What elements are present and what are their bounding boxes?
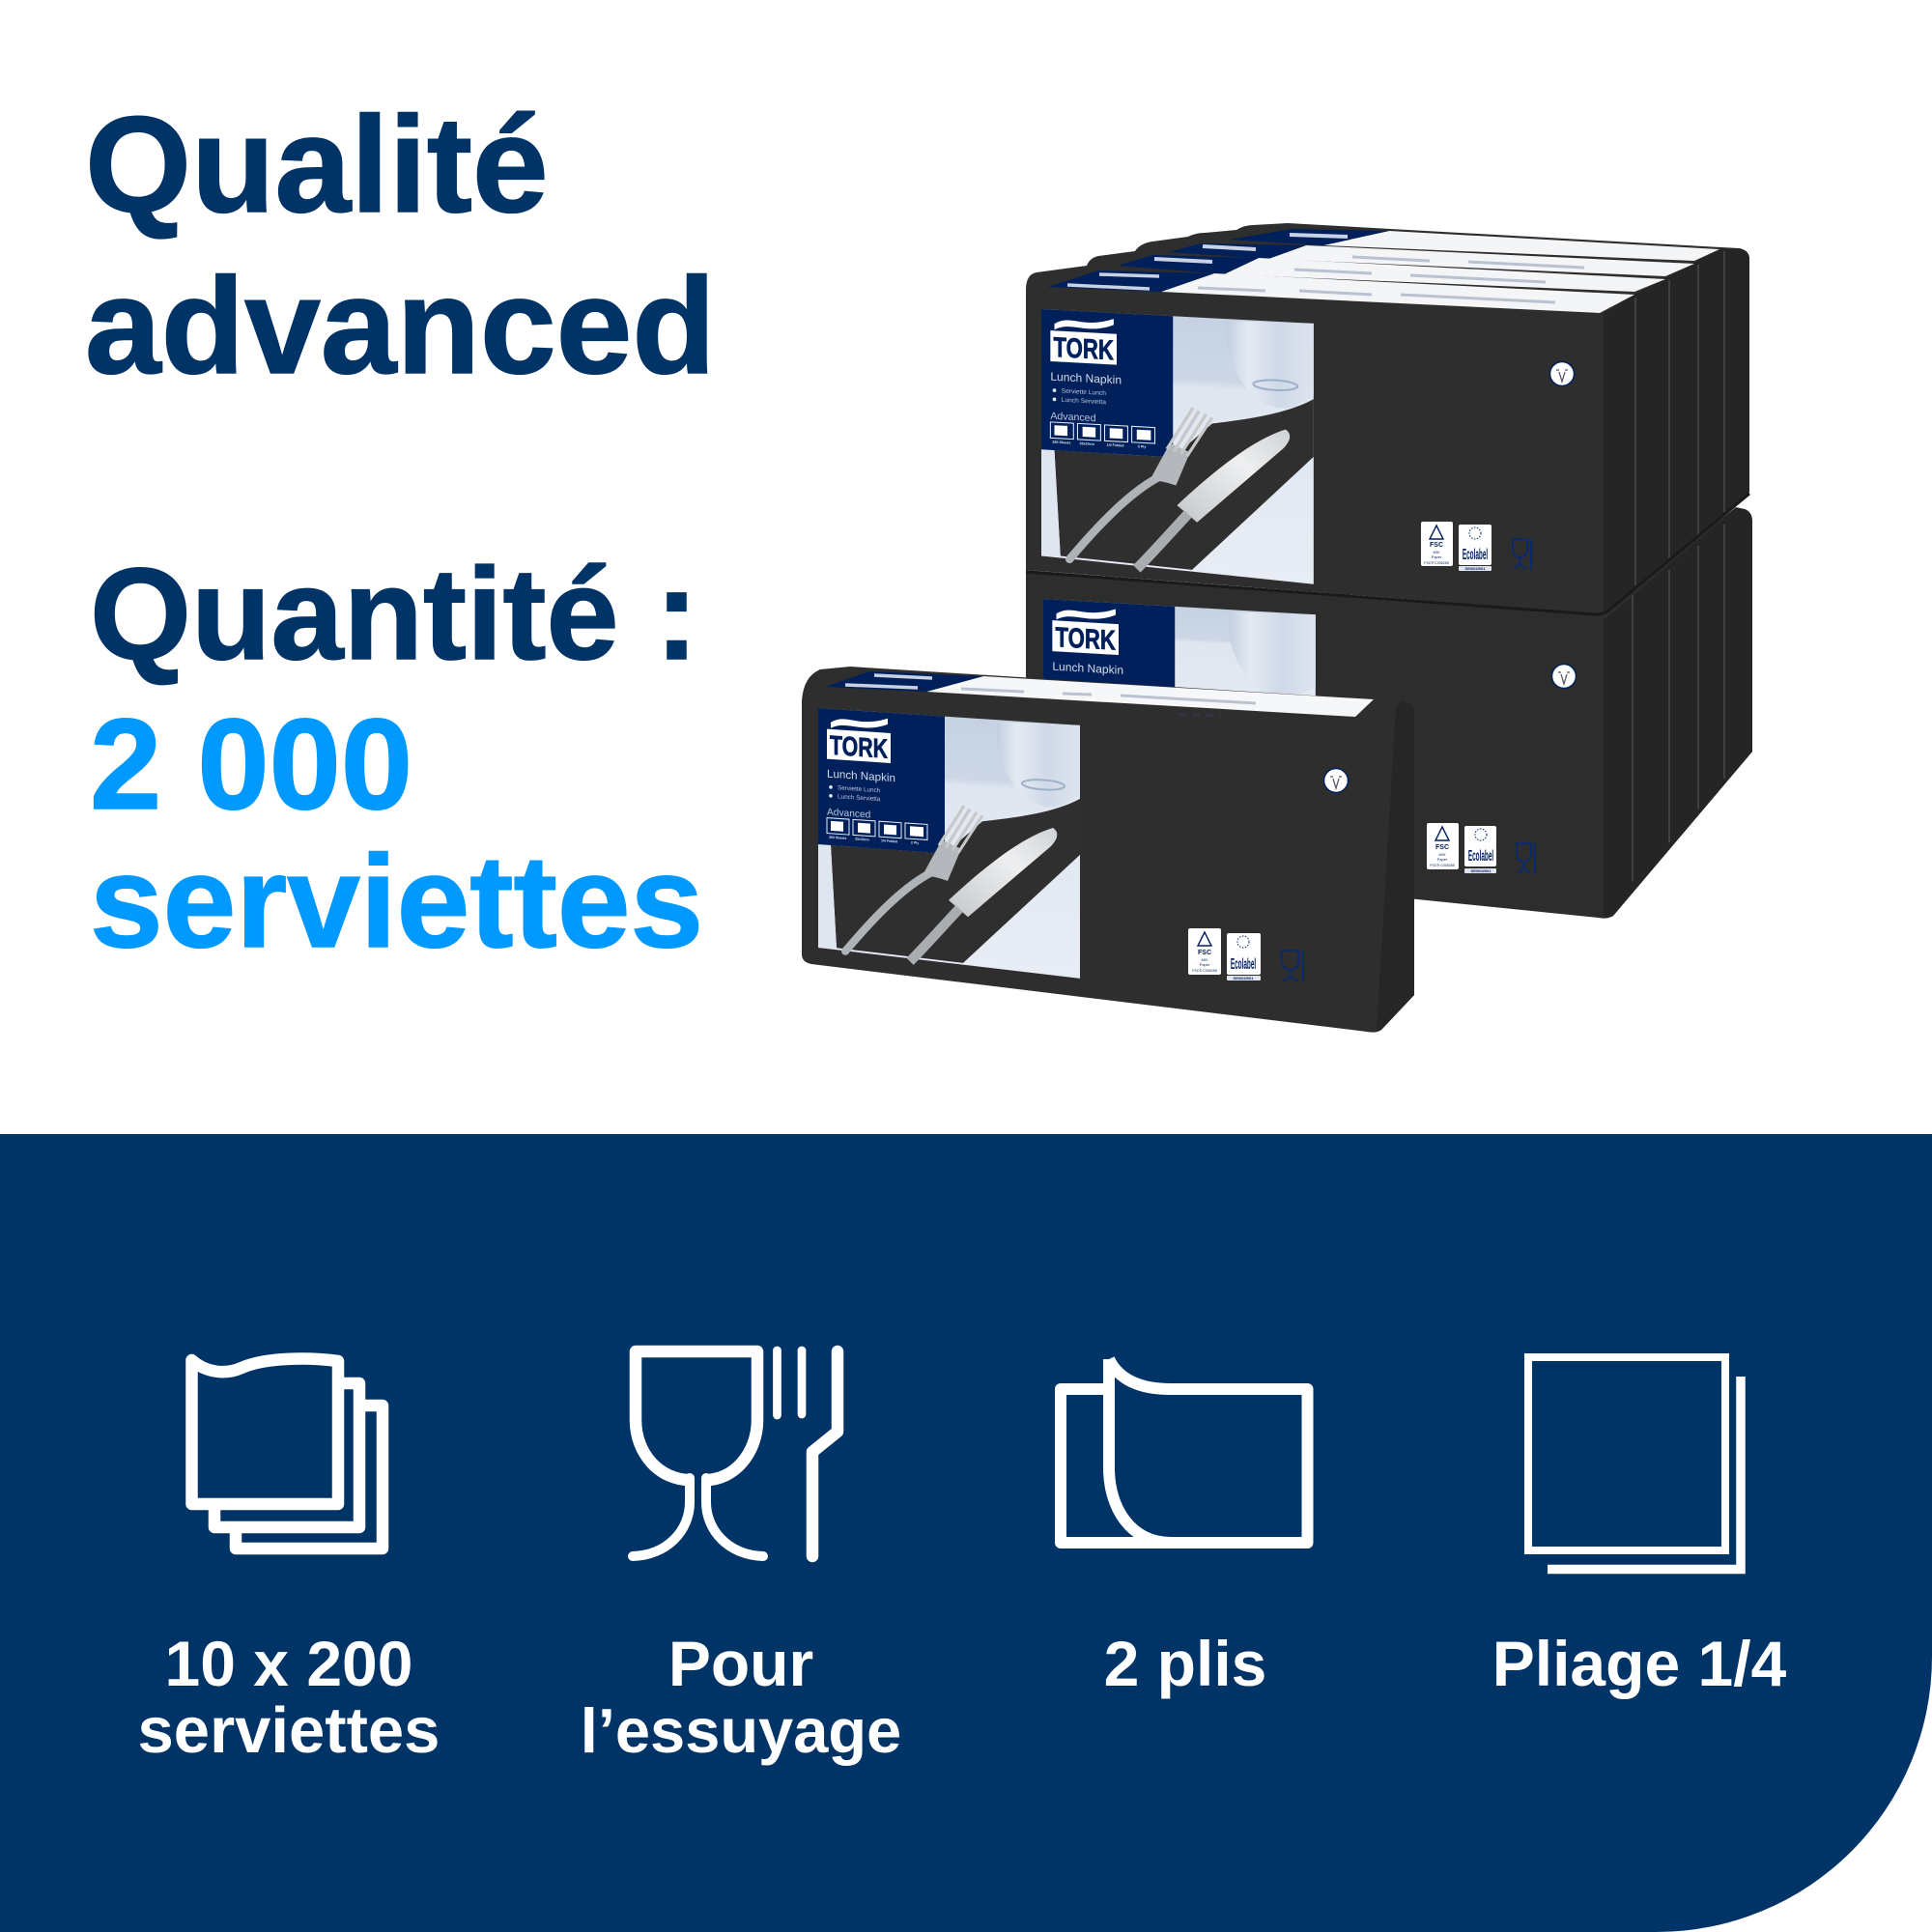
front pack certifications — [1188, 928, 1303, 981]
pack top band 2 — [1118, 255, 1665, 292]
front pack label: 33x33cm — [855, 838, 869, 841]
lower stack sticker — [1551, 665, 1577, 688]
lower stack certifications: MIX — [1438, 852, 1446, 857]
front pack sticker — [1323, 769, 1349, 792]
front pack certifications: FSC — [1198, 950, 1211, 956]
upper pack label: 33x33cm — [1080, 441, 1094, 446]
label: for wiping: l’essuyage — [581, 1695, 901, 1766]
upper pack certifications: SE/004/001 — [1465, 566, 1486, 571]
label: 10 x 200 napkins: 10 x 200 — [165, 1628, 412, 1699]
heading: quantity: serviettes — [90, 828, 703, 975]
upper pack sticker — [1549, 361, 1575, 386]
front pack — [802, 667, 1414, 1033]
upper pack certifications: FSC® C005255 — [1424, 561, 1449, 565]
lower stack certifications: FSC® C005255 — [1430, 864, 1455, 867]
front pack label: 360 Sheets — [829, 836, 846, 840]
lower stack label — [1043, 599, 1316, 744]
front pack certifications: MIX — [1201, 957, 1208, 962]
front pack label: Lunch Servietta — [838, 793, 881, 803]
front pack label: 2 Ply — [911, 840, 919, 845]
label: 10 x 200 napkins — [138, 1628, 440, 1767]
front pack certifications: Ecolabel — [1231, 955, 1256, 973]
front pack label: Advanced — [827, 808, 871, 821]
heading: quantity: Quantité : — [90, 541, 698, 687]
front pack certifications: SE/004/001 — [1234, 976, 1254, 980]
upper pack certifications: Paper — [1432, 554, 1442, 559]
label: quarter fold: Pliage 1/4 — [1492, 1628, 1787, 1699]
front pack certifications: Paper — [1200, 962, 1210, 967]
upper stack of packs — [1026, 223, 1749, 614]
upper pack label: 360 Sheets — [1052, 440, 1070, 445]
upper pack certifications: FSC — [1430, 542, 1443, 549]
heading: quality: Qualité — [85, 88, 549, 241]
heading: quantity — [90, 541, 703, 975]
product image: stacked napkin packs — [802, 223, 1752, 1033]
upper pack label: TORK — [1053, 332, 1114, 366]
label: 10 x 200 napkins: serviettes — [138, 1694, 440, 1767]
upper pack label: Lunch Servietta — [1062, 397, 1106, 406]
upper pack certifications: Ecolabel — [1463, 546, 1488, 563]
lower stack label: Lunch Napkin — [1052, 660, 1123, 677]
front pack label — [818, 708, 1080, 979]
upper pack label — [1041, 309, 1314, 584]
pack top band 3 — [1169, 243, 1694, 276]
lower stack of packs — [1026, 507, 1752, 919]
lower stack certifications: Ecolabel — [1468, 847, 1493, 865]
upper pack certifications — [1421, 522, 1531, 571]
heading: quality — [85, 88, 716, 402]
panel: product features — [0, 1134, 1932, 1932]
front pack certifications: FSC® C005255 — [1192, 969, 1217, 973]
label: for wiping — [581, 1628, 901, 1766]
lower stack certifications — [1427, 823, 1535, 874]
upper pack label: Advanced — [1050, 411, 1096, 424]
icon: quarter fold — [1528, 1357, 1741, 1569]
front pack label: Serviette Lunch — [838, 784, 881, 794]
pack top band 4 — [1229, 229, 1719, 261]
lower stack label: TORK — [1055, 622, 1116, 657]
icon: two ply — [1061, 1359, 1308, 1543]
upper pack label: 2 Ply — [1138, 444, 1146, 449]
front pack label: Lunch Napkin — [827, 768, 895, 784]
front pack label: 1/4 Folded — [881, 838, 897, 843]
pack top band 1 — [1048, 270, 1634, 313]
heading: quantity: 2 000 — [90, 693, 412, 837]
label: for wiping: Pour — [668, 1628, 813, 1699]
front pack top band — [825, 671, 1374, 717]
upper pack label: Serviette Lunch — [1062, 388, 1106, 397]
label: two ply: 2 plis — [1104, 1628, 1266, 1699]
lower stack certifications: FSC — [1435, 844, 1449, 851]
lower stack certifications: SE/004/001 — [1471, 868, 1492, 873]
icon: glass and fork — [633, 1350, 838, 1556]
heading: quality: advanced — [85, 249, 716, 402]
upper pack label: 1/4 Folded — [1107, 443, 1124, 448]
upper pack certifications: MIX — [1433, 550, 1440, 554]
upper pack label: Lunch Napkin — [1050, 370, 1122, 387]
front pack label: TORK — [830, 730, 888, 764]
icon: stack of napkins — [191, 1359, 383, 1548]
lower stack certifications: Paper — [1437, 857, 1448, 862]
